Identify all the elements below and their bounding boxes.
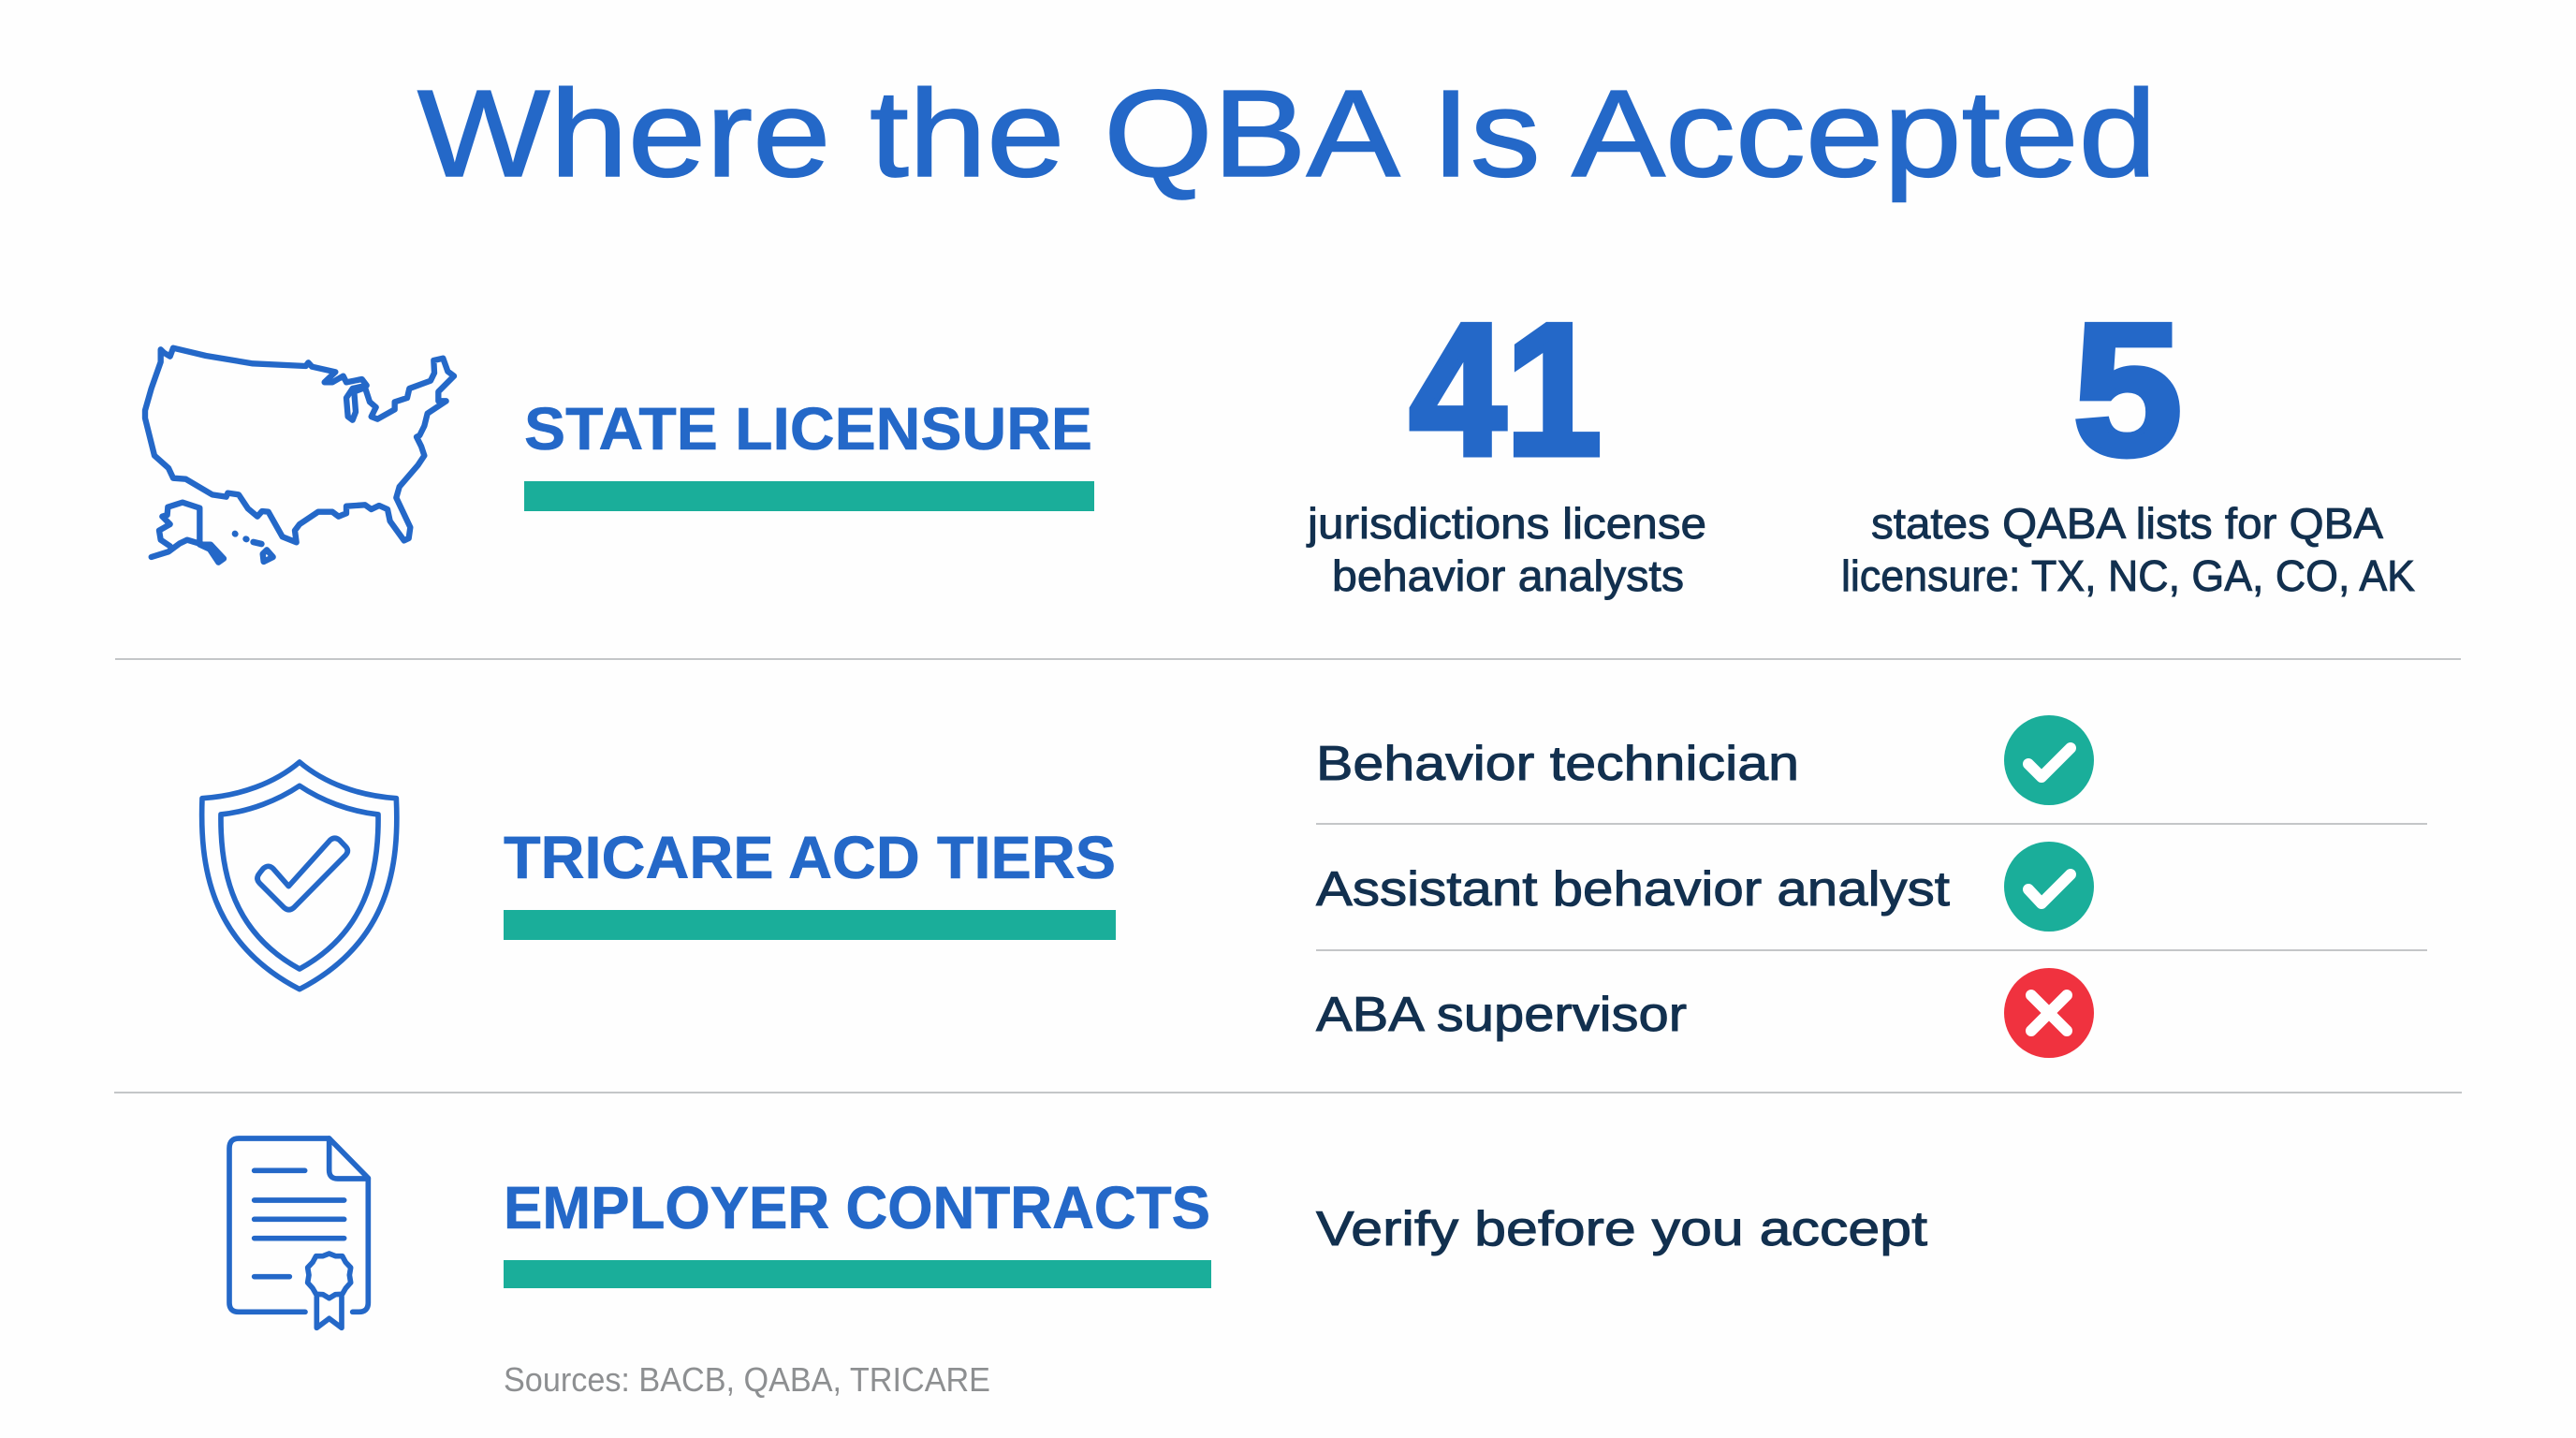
sources: Sources: BACB, QABA, TRICARE [504, 1360, 990, 1399]
icon: cross [2004, 968, 2094, 1058]
icon: contract document [229, 1138, 368, 1328]
stat: 41: behavior analysts [1332, 551, 1684, 600]
panel: employer contracts [229, 1138, 1928, 1399]
heading: state licensure: STATE LICENSURE [524, 395, 1092, 462]
row: assistant behavior analyst [1316, 842, 2094, 932]
icon: shield [202, 762, 397, 990]
row: behavior technician: Behavior technician [1316, 737, 1799, 791]
stat: 41 [1306, 286, 1706, 600]
bar: tricare [504, 910, 1116, 940]
stat: 5: licensure: TX, NC, GA, CO, AK [1841, 551, 2415, 600]
bar: employer contracts [504, 1260, 1211, 1288]
stat: 5 [1841, 286, 2415, 600]
panel: state licensure [145, 286, 2415, 600]
bar: state licensure [524, 481, 1094, 511]
panel: tricare acd tiers [202, 715, 2427, 1058]
stat: 41: jurisdictions license [1306, 499, 1706, 548]
row: behavior technician [1316, 715, 2094, 805]
text: verify: Verify before you accept [1316, 1202, 1928, 1256]
icon: check [2004, 842, 2094, 932]
heading: employer contracts: EMPLOYER CONTRACTS [504, 1174, 1210, 1241]
stat: 5: states QABA lists for QBA [1871, 499, 2383, 548]
icon: US map [145, 348, 454, 563]
stat: 5: 5 [2073, 286, 2182, 494]
row: assistant behavior analyst: Assistant behavior analyst [1316, 862, 1951, 917]
row: aba supervisor [1316, 968, 2094, 1058]
stat: 41: 41 [1410, 286, 1602, 494]
row: aba supervisor: ABA supervisor [1316, 988, 1687, 1042]
icon: check [2004, 715, 2094, 805]
heading: tricare acd tiers: TRICARE ACD TIERS [504, 824, 1116, 891]
title: Where the QBA Is Accepted [417, 65, 2157, 202]
